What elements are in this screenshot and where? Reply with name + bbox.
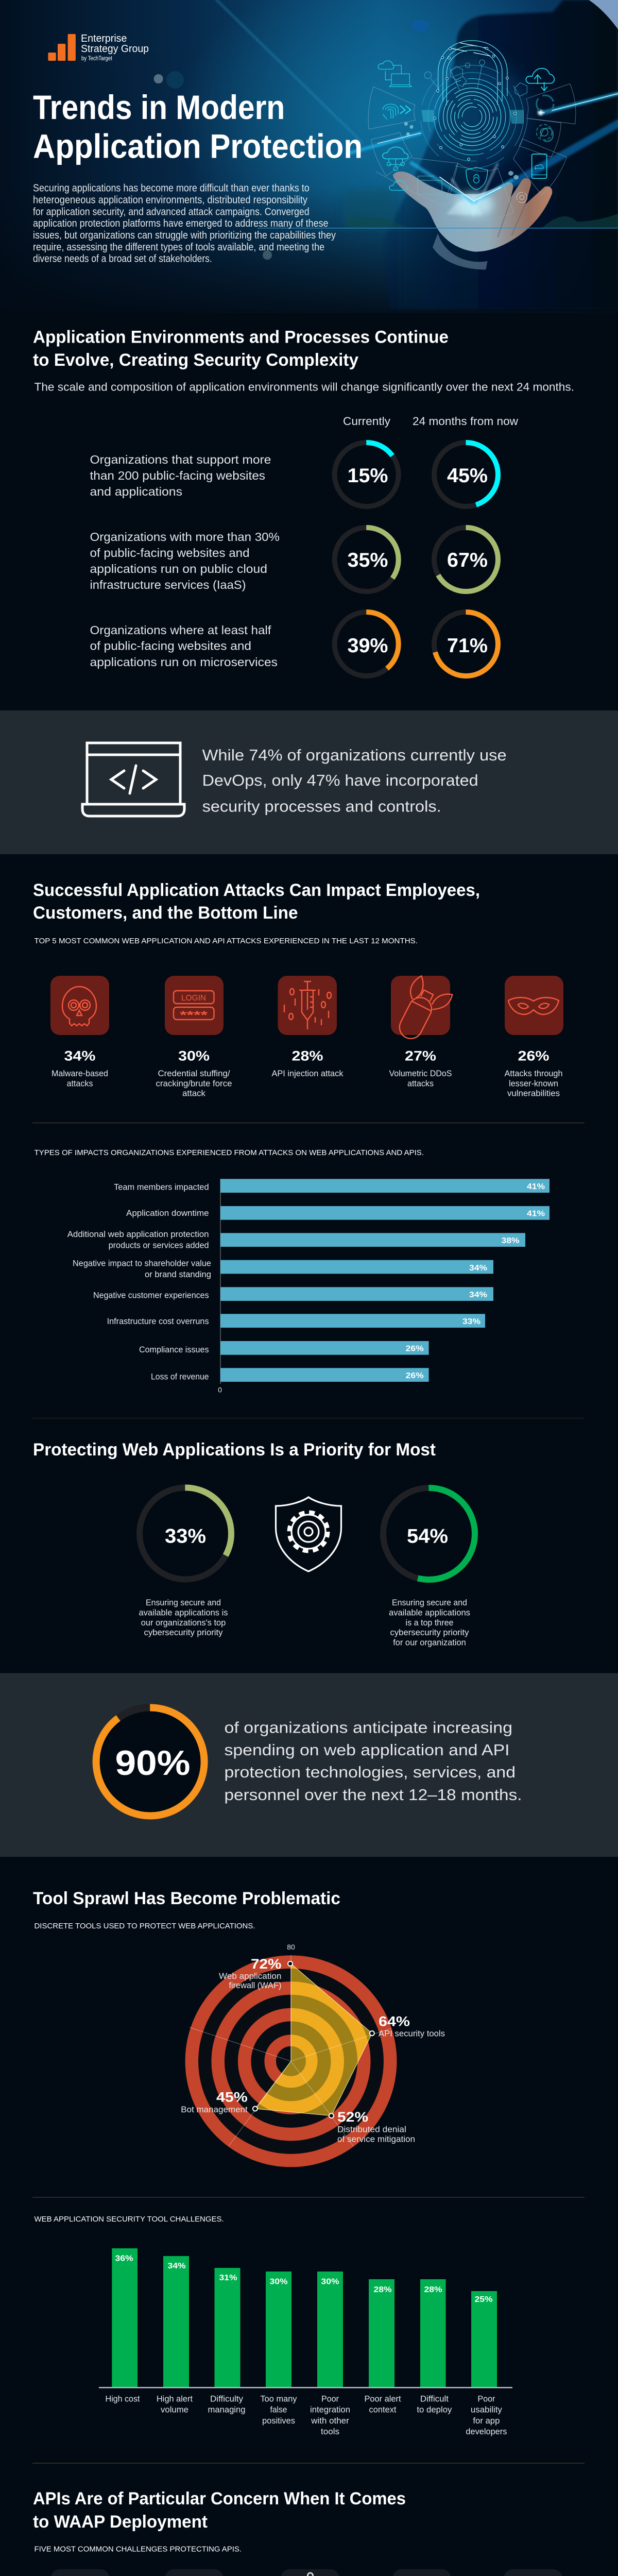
- bar: additional protection products: [67, 1230, 525, 1250]
- bar: shareholder value: 34%: [469, 1264, 487, 1273]
- callout text: spending on web application and API: [225, 1741, 510, 1759]
- ring panel: 54% top three priority: available applications: [389, 1608, 470, 1617]
- row: 200 public-facing websites: and applications: [90, 485, 182, 498]
- ring: 71%: [434, 612, 498, 676]
- column: poor integration: 30%: [321, 2277, 339, 2286]
- subheading: five challenges: FIVE MOST COMMON CHALLENGES PROTECTING APIS.: [34, 2546, 242, 2554]
- row: microservices: [90, 612, 498, 676]
- column: difficulty managing: Difficulty: [210, 2395, 244, 2404]
- column: difficult to deploy: [417, 2279, 452, 2415]
- row: 200 public-facing websites: Organizations that support more: [90, 453, 271, 466]
- attack: malware: Malware-based: [52, 1069, 108, 1078]
- attack: malware: 34%: [64, 1048, 96, 1063]
- attack: lesser-known vulnerabilities: vulnerabilities: [507, 1089, 560, 1098]
- icon: skull: [62, 987, 96, 1026]
- row: microservices: of public-facing websites and: [90, 639, 251, 652]
- row: microservices: applications run on microservices: [90, 655, 278, 669]
- heading: successful application attacks: [33, 880, 480, 923]
- column: difficulty managing: 31%: [219, 2274, 237, 2282]
- ring panel: 33% top priority: [139, 1488, 231, 1637]
- data label: 45% bot management: [181, 2090, 248, 2114]
- digital padlock: [421, 41, 527, 168]
- bar: loss of revenue: [151, 1368, 429, 1382]
- title: Trends in Modern: [33, 88, 285, 126]
- column: poor alert context: 28%: [374, 2285, 391, 2294]
- bar: negative customer experiences: [93, 1287, 493, 1301]
- ring: 35%: [335, 528, 399, 591]
- bar: shareholder value: [73, 1259, 493, 1279]
- bar: team members impacted: 41%: [527, 1182, 545, 1191]
- callout text: personnel over the next 12–18 months.: [225, 1786, 522, 1804]
- radar chart: discrete tools: 80: [287, 1943, 295, 1951]
- data label: 72% web application firewall: Web application: [219, 1972, 281, 1981]
- bar: loss of revenue: Loss of revenue: [151, 1372, 209, 1381]
- title: [33, 88, 363, 165]
- logo: Enterprise Strategy Group: Enterprise: [81, 33, 127, 44]
- icon: login form: [174, 991, 214, 1021]
- column: difficult to deploy: 28%: [424, 2285, 442, 2294]
- axis zero label: 0: [218, 1386, 222, 1394]
- row: 200 public-facing websites: than 200 public-facing websites: [90, 469, 265, 482]
- bar chart: impacts: [67, 1179, 550, 1394]
- bar: application downtime: [126, 1206, 550, 1220]
- bar: additional protection products: 38%: [502, 1236, 520, 1245]
- column: too many false positives: 30%: [270, 2277, 287, 2286]
- subheading: The scale and composition of application environments will change significantly over the next 24 months.: [34, 381, 574, 394]
- callout text: While 74% of organizations currently use: [202, 746, 507, 764]
- icon: syringe: [284, 981, 331, 1029]
- subheading: types of impacts: TYPES OF IMPACTS ORGANIZATIONS EXPERIENCED FROM ATTACKS ON WEB APPLICATIONS AND APIS.: [34, 1149, 424, 1157]
- radar data polygon: [256, 1965, 371, 2116]
- logo: Enterprise Strategy Group: [48, 33, 149, 62]
- ring: 67%: [434, 528, 498, 591]
- ring panel: 54% top three priority: [383, 1488, 475, 1648]
- column: high cost: 36%: [115, 2255, 133, 2263]
- bar: application downtime: Application downtime: [126, 1209, 209, 1218]
- challenge: multiple API tools: [501, 2569, 565, 2576]
- subheading: tool challenges: WEB APPLICATION SECURITY TOOL CHALLENGES.: [34, 2215, 224, 2224]
- data label: 52% DDoS mitigation: [337, 2109, 415, 2144]
- column: too many false positives: Too many: [261, 2395, 297, 2404]
- cyan icons: [378, 61, 554, 202]
- radar chart: discrete tools: [181, 1943, 445, 2167]
- icon: mask: [508, 997, 559, 1014]
- data label: 72% web application firewall: firewall (WAF): [229, 1981, 281, 1990]
- column: poor alert context: context: [369, 2405, 397, 2415]
- challenge: inventorying APIs: [280, 2569, 340, 2576]
- attack: credential stuffing: cracking/brute force: [156, 1079, 232, 1089]
- bar: team members impacted: [114, 1179, 550, 1193]
- challenge: keeping pace: [42, 2569, 118, 2576]
- column: difficult to deploy: to deploy: [417, 2405, 452, 2415]
- bar: infrastructure cost overruns: Infrastructure cost overruns: [107, 1317, 209, 1326]
- row: 200 public-facing websites: [90, 443, 498, 506]
- attack: credential stuffing: 30%: [178, 1048, 210, 1063]
- data label: 52% DDoS mitigation: 52%: [337, 2109, 368, 2125]
- bar: shareholder value: or brand standing: [145, 1270, 211, 1279]
- column: poor integration: [310, 2272, 350, 2436]
- ring panel: 33% top priority: Ensuring secure and: [146, 1598, 221, 1607]
- column: poor integration: with other: [311, 2416, 349, 2426]
- bar: compliance issues: [139, 1341, 429, 1355]
- heading: protecting web applications: Protecting Web Applications Is a Priority for Most: [33, 1440, 436, 1460]
- bar: team members impacted: Team members impacted: [114, 1182, 209, 1192]
- column: difficulty managing: managing: [208, 2405, 245, 2415]
- bar: loss of revenue: 26%: [406, 1371, 424, 1380]
- icon: bomb: [390, 974, 454, 1048]
- column: poor usability: [466, 2291, 507, 2436]
- intro paragraph: application protection platforms have emerged to address many of these: [33, 218, 329, 229]
- row: public cloud IaaS: infrastructure services (IaaS): [90, 578, 246, 591]
- bar: infrastructure cost overruns: 33%: [462, 1317, 480, 1326]
- heading: APIs of particular concern: to WAAP Deployment: [33, 2512, 208, 2532]
- challenge: data governance: [151, 2569, 237, 2576]
- ring: 15%: 15%: [347, 465, 388, 487]
- data label: 64% API security tools: API security tools: [379, 2029, 445, 2038]
- icon: laptop with code: [82, 743, 184, 816]
- bar: negative customer experiences: Negative customer experiences: [93, 1291, 209, 1300]
- bar: application downtime: 41%: [527, 1210, 545, 1218]
- ring panel: 54% top three priority: is a top three: [406, 1618, 453, 1628]
- column chart: tool challenges: [99, 2248, 512, 2436]
- ring: 39%: [335, 612, 399, 676]
- column: too many false positives: [261, 2272, 297, 2426]
- bar: negative customer experiences: 34%: [469, 1291, 487, 1299]
- column: high alert volume: High alert: [157, 2395, 193, 2404]
- data label: 52% DDoS mitigation: Distributed denial: [337, 2125, 406, 2134]
- ring panel: 54% top three priority: 54%: [407, 1526, 448, 1548]
- intro paragraph: diverse needs of a broad set of stakeholders.: [33, 253, 212, 265]
- ring: 39%: 39%: [347, 635, 388, 657]
- column: poor integration: Poor: [321, 2395, 339, 2404]
- bar: shareholder value: Negative impact to shareholder value: [73, 1259, 211, 1268]
- column: high alert volume: [157, 2256, 193, 2415]
- heading: successful application attacks: Successful Application Attacks Can Impact Employees,: [33, 880, 480, 900]
- ring panel: 54% top three priority: cybersecurity priority: [390, 1628, 469, 1637]
- callout text: of organizations anticipate increasing: [225, 1719, 512, 1736]
- column: too many false positives: false: [270, 2405, 287, 2415]
- light beams: [216, 0, 618, 205]
- attack: credential stuffing: [156, 976, 232, 1098]
- row: public cloud IaaS: Organizations with more than 30%: [90, 530, 280, 544]
- intro paragraph: for application security, and advanced attack campaigns. Converged: [33, 206, 310, 217]
- attack: credential stuffing: Credential stuffing/: [158, 1069, 230, 1078]
- attack: malware: [50, 976, 109, 1089]
- subheading: top 5 attacks: TOP 5 MOST COMMON WEB APPLICATION AND API ATTACKS EXPERIENCED IN THE LAST 12 MONTHS.: [34, 937, 418, 945]
- column: poor alert context: Poor alert: [365, 2395, 401, 2404]
- data label: 45% bot management: Bot management: [181, 2105, 248, 2114]
- data label: 52% DDoS mitigation: of service mitigation: [337, 2135, 415, 2144]
- ring: 45%: [434, 443, 498, 506]
- hand: [433, 233, 488, 269]
- data label: 64% API security tools: 64%: [379, 2014, 410, 2029]
- attack: lesser-known vulnerabilities: lesser-known: [509, 1079, 558, 1089]
- heading: application environments: Application Environments and Processes Continue: [33, 328, 449, 347]
- ring panel: 54% top three priority: for our organization: [393, 1638, 466, 1648]
- bar: additional protection products: Additional web application protection: [67, 1230, 209, 1239]
- intro paragraph: [33, 183, 336, 265]
- column header: currently: Currently: [343, 415, 390, 428]
- heading: tool sprawl: Tool Sprawl Has Become Problematic: [33, 1889, 340, 1908]
- intro paragraph: issues, but organizations can struggle with prioritizing the capabilities they: [33, 230, 336, 241]
- attack: volumetric DDoS: 27%: [405, 1048, 436, 1063]
- ring: 71%: 71%: [447, 635, 488, 657]
- ring panel: 54% top three priority: Ensuring secure and: [392, 1598, 467, 1607]
- ring panel: 33% top priority: cybersecurity priority: [144, 1628, 223, 1637]
- row: microservices: Organizations where at least half: [90, 623, 271, 637]
- row: public cloud IaaS: of public-facing websites and: [90, 546, 249, 560]
- panel: hero header: [0, 0, 618, 313]
- panel: 90% callout: [0, 1673, 618, 1857]
- attack: volumetric DDoS: [389, 974, 454, 1089]
- row: public cloud IaaS: applications run on public cloud: [90, 562, 267, 575]
- column: poor usability: 25%: [475, 2295, 492, 2304]
- intro paragraph: require, assessing the different types of tools available, and meeting the: [33, 242, 324, 253]
- data label: 45% bot management: 45%: [216, 2090, 248, 2105]
- bar: infrastructure cost overruns: [107, 1314, 485, 1328]
- column: poor usability: usability: [471, 2405, 503, 2415]
- panel: DevOps callout: [0, 710, 618, 854]
- ring: 67%: 67%: [447, 549, 488, 571]
- ring panel: 33% top priority: 33%: [165, 1526, 206, 1548]
- callout text: protection technologies, services, and: [225, 1763, 516, 1781]
- intro paragraph: Securing applications has become more difficult than ever thanks to: [33, 183, 310, 194]
- intro paragraph: heterogeneous application environments, distributed responsibility: [33, 195, 307, 206]
- callout text: DevOps, only 47% have incorporated: [202, 771, 478, 789]
- icon: login form: ****: [180, 1009, 208, 1021]
- ring: 90%: [93, 1704, 208, 1820]
- data label: 72% web application firewall: 72%: [251, 1956, 281, 1972]
- column: poor usability: for app: [473, 2416, 500, 2426]
- column: poor usability: developers: [466, 2427, 507, 2436]
- data label: 72% web application firewall: [219, 1956, 281, 1990]
- column: too many false positives: positives: [262, 2416, 295, 2426]
- column: high alert volume: volume: [161, 2405, 188, 2415]
- subheading: discrete tools: DISCRETE TOOLS USED TO PROTECT WEB APPLICATIONS.: [34, 1922, 255, 1930]
- column: difficult to deploy: Difficult: [420, 2395, 449, 2404]
- bar: additional protection products: products or services added: [109, 1241, 209, 1250]
- icon: clipboard checklist: [296, 2573, 325, 2576]
- bar: compliance issues: 26%: [406, 1345, 424, 1353]
- ring: 35%: 35%: [347, 549, 388, 571]
- heading: application environments: to Evolve, Creating Security Complexity: [33, 350, 358, 370]
- attack: API injection: [272, 976, 344, 1078]
- column: difficulty managing: [208, 2268, 245, 2415]
- ring: 15%: [335, 443, 399, 506]
- attack: lesser-known vulnerabilities: Attacks through: [505, 1069, 562, 1078]
- icon: login form: LOGIN: [181, 994, 206, 1003]
- attack: volumetric DDoS: attacks: [407, 1079, 434, 1089]
- callout text: security processes and controls.: [202, 798, 441, 815]
- heading: application environments: [33, 328, 449, 370]
- hero illustration: hand holding digital padlock: [0, 0, 618, 313]
- ring panel: 33% top priority: available applications is: [139, 1608, 228, 1617]
- column: high alert volume: 34%: [168, 2262, 185, 2270]
- column: poor usability: Poor: [477, 2395, 495, 2404]
- column: high cost: High cost: [105, 2395, 140, 2404]
- column: poor integration: integration: [310, 2405, 350, 2415]
- column header: 24 months from now: 24 months from now: [413, 415, 518, 428]
- heading: successful application attacks: Customers, and the Bottom Line: [33, 903, 298, 923]
- attack: credential stuffing: attack: [182, 1089, 206, 1098]
- heading: APIs of particular concern: [33, 2489, 406, 2532]
- attack: API injection: 28%: [291, 1048, 323, 1063]
- attack: API injection: API injection attack: [272, 1069, 344, 1078]
- column: high cost: [105, 2248, 140, 2404]
- attack: volumetric DDoS: Volumetric DDoS: [389, 1069, 452, 1078]
- ring panel: 33% top priority: our organizations's top: [141, 1618, 226, 1628]
- bar: compliance issues: Compliance issues: [139, 1345, 209, 1354]
- attack: lesser-known vulnerabilities: 26%: [518, 1048, 549, 1063]
- ring: 90%: 90%: [115, 1743, 191, 1783]
- logo: Enterprise Strategy Group: Strategy Group: [81, 43, 149, 55]
- data label: 64% API security tools: [379, 2014, 445, 2038]
- column: poor integration: tools: [321, 2427, 339, 2436]
- row: public cloud IaaS: [90, 528, 498, 591]
- title: Application Protection: [33, 127, 363, 165]
- icon: shield with gear: [276, 1497, 341, 1571]
- translucent panels: [368, 84, 576, 221]
- attack: malware: attacks: [67, 1079, 93, 1089]
- callout text: [225, 1719, 522, 1804]
- callout text: [202, 746, 507, 815]
- logo: Enterprise Strategy Group: by TechTarget: [81, 56, 113, 62]
- challenge: API specifications: [392, 2569, 451, 2576]
- ring: 45%: 45%: [447, 465, 488, 487]
- attack: lesser-known vulnerabilities: [505, 976, 563, 1098]
- column: poor alert context: [365, 2279, 401, 2415]
- heading: APIs of particular concern: APIs Are of Particular Concern When It Comes: [33, 2489, 406, 2509]
